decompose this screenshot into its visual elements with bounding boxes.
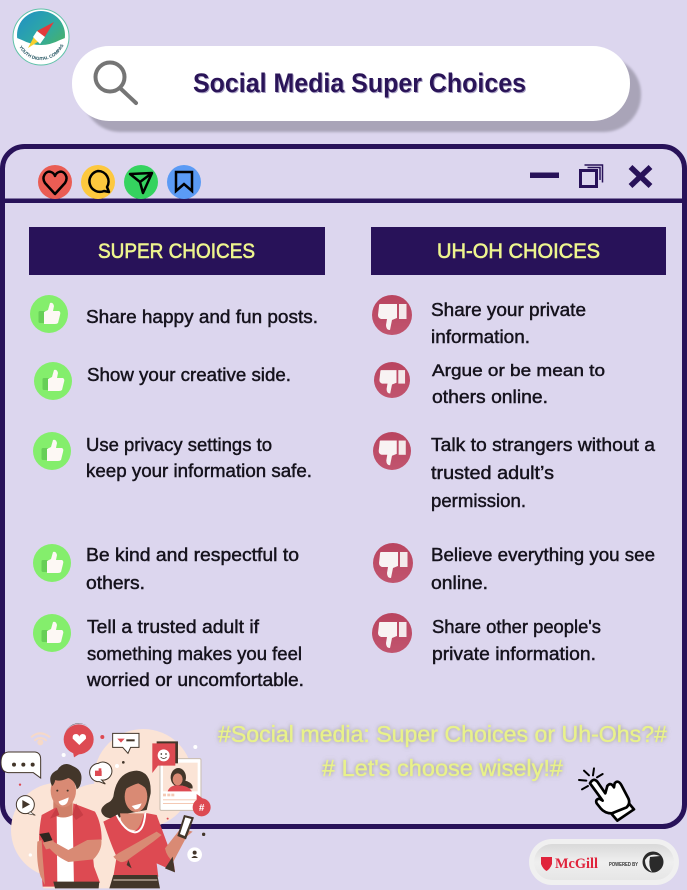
icon: heart bbox=[38, 165, 72, 199]
item: be kind: Be kind and respectful to bbox=[86, 544, 299, 565]
bubble: smiley bbox=[152, 741, 178, 773]
person: woman bbox=[101, 771, 194, 888]
item: other people's information: Share other people's bbox=[432, 616, 601, 637]
item: tell a trusted adult: something makes you feel bbox=[87, 643, 302, 664]
hashtag message: #Social media: Super Choices or Uh-Ohs?# bbox=[218, 721, 667, 747]
heading: uh-oh choices bbox=[371, 227, 666, 275]
item: believe everything: Believe everything you see bbox=[431, 544, 655, 565]
item: show creative side: Show your creative side. bbox=[87, 364, 291, 385]
title: Social Media Super Choices bbox=[193, 68, 526, 98]
bubble: hashtag bbox=[193, 794, 211, 816]
item: argue or be mean: others online. bbox=[432, 386, 548, 407]
window frame bbox=[2, 146, 685, 826]
search bar bbox=[72, 46, 641, 132]
item: other people's information bbox=[372, 613, 601, 664]
icon: clicking hand bbox=[579, 768, 634, 821]
item: share happy posts bbox=[30, 295, 318, 333]
bubble: heart bbox=[64, 723, 94, 757]
icon: send arrow bbox=[124, 165, 158, 199]
bubble: like bbox=[90, 762, 112, 784]
bubble: hashtag: # bbox=[199, 803, 205, 814]
mcgill crest bbox=[541, 857, 552, 871]
person: man bbox=[37, 764, 102, 888]
item: tell a trusted adult: worried or uncomfortable. bbox=[86, 669, 304, 690]
item: private information: Share your private bbox=[431, 299, 586, 320]
item: private information: information. bbox=[431, 326, 530, 347]
icon: minimize bbox=[530, 172, 559, 178]
bubble: hearts message bbox=[113, 733, 139, 753]
heading: super choices: SUPER CHOICES bbox=[98, 240, 255, 263]
partner logo bbox=[642, 852, 664, 872]
powered by: POWERED BY bbox=[609, 862, 639, 868]
icon: close bbox=[630, 167, 650, 186]
item: tell a trusted adult: Tell a trusted adult if bbox=[87, 616, 260, 637]
logo: youth digital compass bbox=[12, 8, 70, 66]
item: show creative side bbox=[34, 362, 291, 400]
icon: restore bbox=[580, 165, 602, 186]
window controls bbox=[530, 165, 650, 186]
item: private information bbox=[372, 295, 586, 347]
panel: super choices bbox=[29, 227, 325, 690]
icon: wifi bbox=[31, 733, 50, 744]
footer badge: mcgill bbox=[529, 839, 679, 885]
item: share happy posts: Share happy and fun posts. bbox=[86, 306, 318, 327]
hashtag message: # Let's choose wisely!# bbox=[322, 755, 563, 781]
search bar shadow bbox=[83, 57, 641, 132]
item: believe everything bbox=[373, 543, 655, 593]
icon: bookmark bbox=[167, 165, 201, 199]
item: privacy settings bbox=[33, 432, 312, 481]
heading: uh-oh choices: UH-OH CHOICES bbox=[437, 240, 600, 263]
item: believe everything: online. bbox=[431, 572, 488, 593]
item: tell a trusted adult bbox=[33, 614, 304, 690]
bubble: typing dots bbox=[1, 752, 41, 778]
item: argue or be mean bbox=[374, 361, 605, 407]
item: talk to strangers bbox=[373, 432, 656, 511]
post card bbox=[160, 759, 201, 810]
item: argue or be mean: Argue or be mean to bbox=[432, 361, 605, 380]
item: other people's information: private information. bbox=[432, 643, 596, 664]
item: talk to strangers: permission. bbox=[431, 490, 526, 511]
item: be kind: others. bbox=[86, 572, 145, 593]
icon: speech bubble bbox=[81, 165, 115, 199]
social reaction icons bbox=[38, 165, 201, 199]
illustration: two people using social media bbox=[1, 723, 211, 888]
item: be kind bbox=[33, 544, 299, 593]
item: talk to strangers: trusted adult’s bbox=[431, 462, 554, 483]
decorative dots and profile icon bbox=[19, 735, 205, 862]
item: talk to strangers: Talk to strangers without a bbox=[431, 434, 656, 455]
item: privacy settings: keep your information safe. bbox=[86, 460, 312, 481]
bubble: play bbox=[16, 796, 35, 815]
panel: uh-oh choices bbox=[371, 227, 666, 664]
mcgill wordmark: McGill bbox=[555, 856, 598, 872]
hashtag message bbox=[218, 721, 667, 781]
icon: magnifying glass bbox=[96, 62, 136, 103]
search bar pill bbox=[72, 46, 630, 121]
peach background blob bbox=[11, 729, 193, 888]
heading: super choices bbox=[29, 227, 325, 275]
item: privacy settings: Use privacy settings to bbox=[86, 434, 272, 455]
